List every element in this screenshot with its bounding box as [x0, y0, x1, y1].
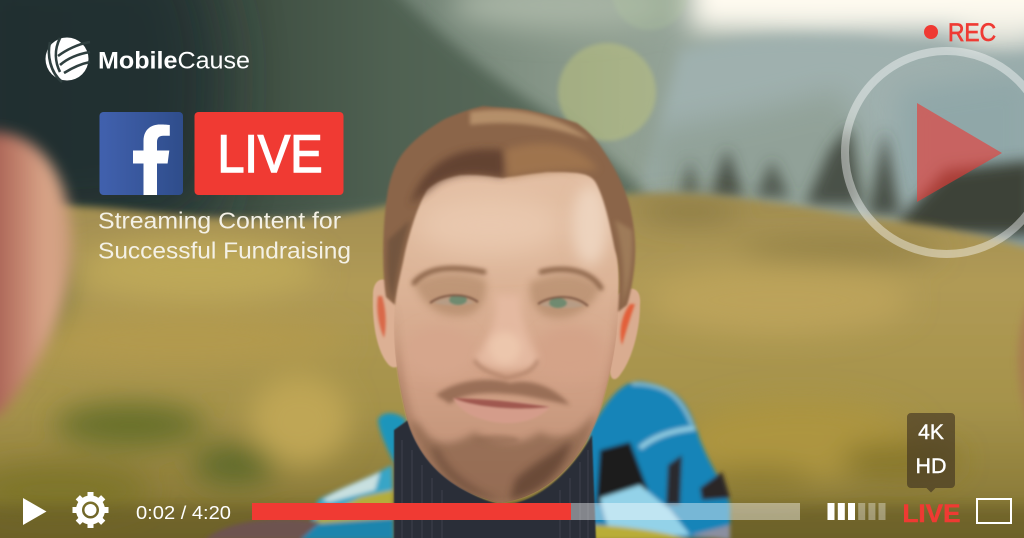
scarf at lower left [205, 519, 320, 538]
icon: f [133, 124, 170, 195]
subtitle: Successful Fundraising [98, 238, 351, 264]
quality tooltip: HD [915, 454, 947, 478]
icon: settings gear [72, 492, 108, 528]
dark forest slope [0, 0, 650, 230]
icon: striped globe [46, 38, 90, 82]
progress bar [252, 503, 800, 520]
left shoulder [378, 413, 406, 465]
signal bars [828, 503, 886, 520]
scarf ribs [402, 440, 588, 538]
moustache [436, 380, 570, 405]
icon: fullscreen [977, 499, 1011, 523]
face shading [395, 185, 625, 506]
ears [373, 280, 640, 379]
rec indicator [924, 19, 996, 47]
eyebrows [414, 268, 601, 288]
rec indicator: REC [948, 19, 996, 47]
sky glow [450, 0, 1024, 50]
distant ridge [640, 36, 1024, 200]
meadow colour patches [0, 204, 960, 516]
logo: MobileCause: MobileCause [98, 48, 250, 74]
facebook badge [100, 112, 183, 195]
quality tooltip: 4K [918, 421, 944, 444]
head shape [394, 160, 619, 503]
live badge: LIVE [218, 125, 322, 184]
beard [410, 412, 595, 506]
quality tooltip [907, 413, 955, 492]
subtitle: Streaming Content for [98, 208, 341, 234]
right shoulder [585, 381, 730, 538]
treeline [680, 125, 1024, 235]
live label: LIVE [902, 500, 960, 528]
large play button [845, 51, 1024, 254]
icon: play [23, 498, 46, 525]
mouth [453, 398, 550, 423]
chin patch [475, 435, 519, 445]
video controls bar [23, 492, 1011, 528]
subtitle [98, 208, 351, 264]
bottom vignette [0, 505, 1024, 538]
lens flares [558, 0, 688, 141]
nose [474, 295, 538, 378]
eyes [430, 295, 588, 308]
hair [383, 106, 635, 312]
man's head [373, 106, 640, 506]
scarf [394, 420, 596, 538]
man's jacket and scarf [205, 381, 730, 538]
blurred fingers at the frame edges [0, 132, 1024, 455]
time code: 0:02 / 4:20 [136, 503, 231, 523]
hair shadows and highlights [410, 149, 504, 205]
live badge [194, 112, 344, 195]
eye sockets [414, 273, 486, 316]
logo: MobileCause [46, 38, 250, 82]
meadow [0, 194, 1024, 538]
